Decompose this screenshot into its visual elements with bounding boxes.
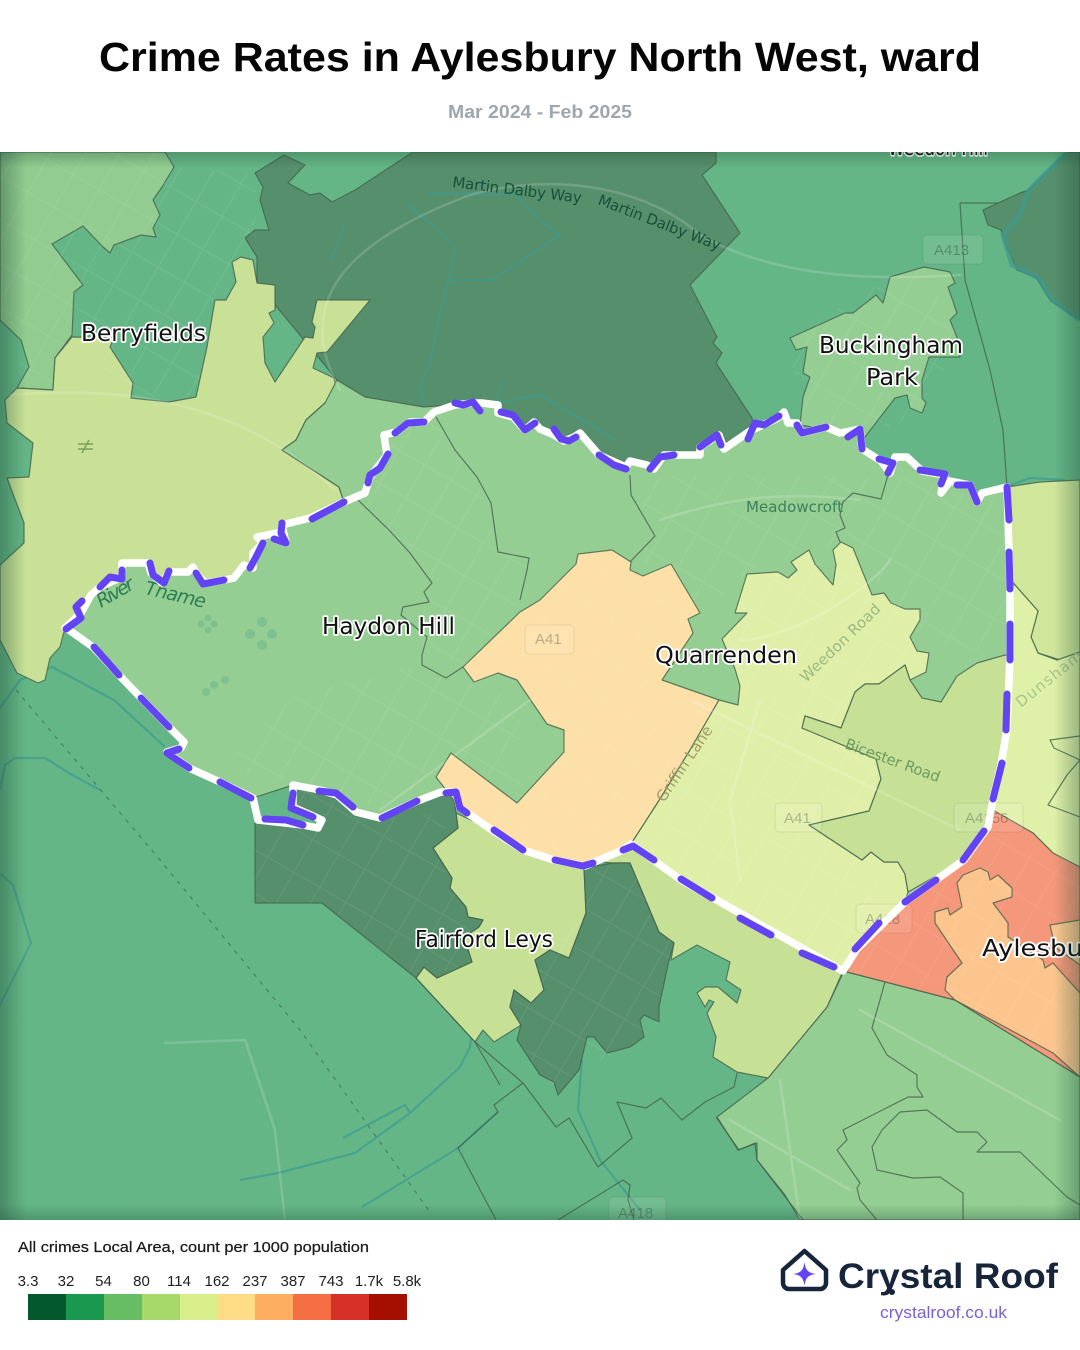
place labels: Weedon Hill [888, 135, 988, 161]
legend scale values: 237 [242, 1273, 268, 1290]
road labels [92, 173, 1080, 805]
area: Fairford dark east [510, 863, 674, 1095]
area: north dark green fields [245, 152, 760, 470]
place labels: Park [866, 365, 919, 391]
main roads [10, 184, 1060, 1220]
road badge labels: A418 [865, 911, 900, 928]
road badge labels: A418 [618, 1205, 653, 1222]
road badge labels [535, 242, 1008, 1222]
road labels: Martin Dalby Way [596, 191, 723, 254]
road labels: River [92, 573, 139, 612]
place labels: Haydon Hill [322, 614, 455, 640]
ward boundary [65, 402, 1010, 971]
logo: Crystal Roof [783, 1251, 1058, 1322]
legend title: All crimes Local Area, count per 1000 population [18, 1239, 369, 1256]
road labels: Weedon Road [796, 600, 884, 686]
place labels [81, 135, 1080, 962]
legend [18, 1239, 422, 1320]
area: east yellow-green [1007, 480, 1080, 660]
street texture [15, 152, 1080, 1086]
logo wordmark: Crystal Roof [838, 1257, 1058, 1296]
legend scale values: 114 [167, 1273, 191, 1290]
area: east pale yellow [990, 585, 1080, 870]
icon: roundabout dots [198, 614, 277, 696]
area: Aylesbury light orange [935, 868, 1080, 1077]
map background: mid green areas [0, 152, 1080, 1220]
legend scale values: 3.3 [18, 1273, 38, 1290]
road badge labels: A4156 [965, 810, 1008, 827]
road labels: Griffin Lane [652, 722, 717, 805]
road badges [525, 235, 1023, 1226]
area: north-east dark green [983, 152, 1080, 320]
place labels: Quarrenden [655, 643, 797, 669]
legend scale values: 162 [204, 1273, 230, 1290]
area: Fairford dark west [255, 785, 483, 978]
stream lines [0, 152, 1080, 1210]
road labels: Bicester Road [843, 735, 943, 786]
boundary purple dashes [66, 402, 1010, 967]
title: Crime Rates in Aylesbury North West, ward [99, 34, 981, 80]
road badge labels: A41 [535, 631, 562, 648]
area: Aylesbury salmon [847, 810, 1080, 1077]
legend scale values: 54 [95, 1273, 112, 1290]
road badge labels: A413 [934, 242, 969, 259]
area: Quarrenden pale yellow [631, 542, 929, 971]
area: Bicester Road yellow-green [802, 655, 1010, 892]
place labels: Buckingham [819, 333, 963, 359]
legend scale values: 387 [280, 1273, 306, 1290]
legend scale values [18, 1273, 422, 1290]
road labels: Meadowcroft [746, 498, 843, 516]
legend scale values: 743 [318, 1273, 344, 1290]
place labels: Fairford Leys [415, 927, 553, 953]
icon: railway station marker [78, 440, 93, 453]
road labels: Thame [143, 577, 208, 613]
area: south-east light green [717, 972, 1080, 1220]
railway line [16, 690, 432, 1215]
legend scale values: 1.7k [355, 1273, 384, 1290]
place labels: Berryfields [81, 321, 206, 347]
legend scale values: 32 [58, 1273, 74, 1290]
logo key dot on the y [889, 1289, 895, 1295]
map edge vignette [0, 152, 1080, 1220]
area: Berryfields yellow-green [0, 257, 370, 683]
legend colour bar [28, 1294, 407, 1320]
road badge labels: A41 [784, 810, 811, 827]
ward interior base: light green [73, 380, 1006, 896]
boundary white base line [65, 403, 1010, 971]
legend scale values: 80 [133, 1273, 150, 1290]
website url: crystalroof.co.uk [880, 1304, 1008, 1322]
road labels: Martin Dalby Way [452, 173, 583, 207]
area: Fairford Leys yellow-green [416, 813, 586, 1042]
legend scale values: 5.8k [393, 1273, 422, 1290]
icon: house with star [783, 1251, 826, 1289]
sub-area boundary lines [358, 203, 1080, 1220]
area: east-centre yellow-green [600, 844, 843, 1078]
area: north-west light green [0, 152, 174, 390]
area: Quarrenden orange [436, 550, 719, 866]
area: Buckingham Park [790, 267, 960, 440]
east sub-boundaries [1048, 736, 1080, 817]
subtitle: date range: Mar 2024 - Feb 2025 [448, 101, 632, 122]
